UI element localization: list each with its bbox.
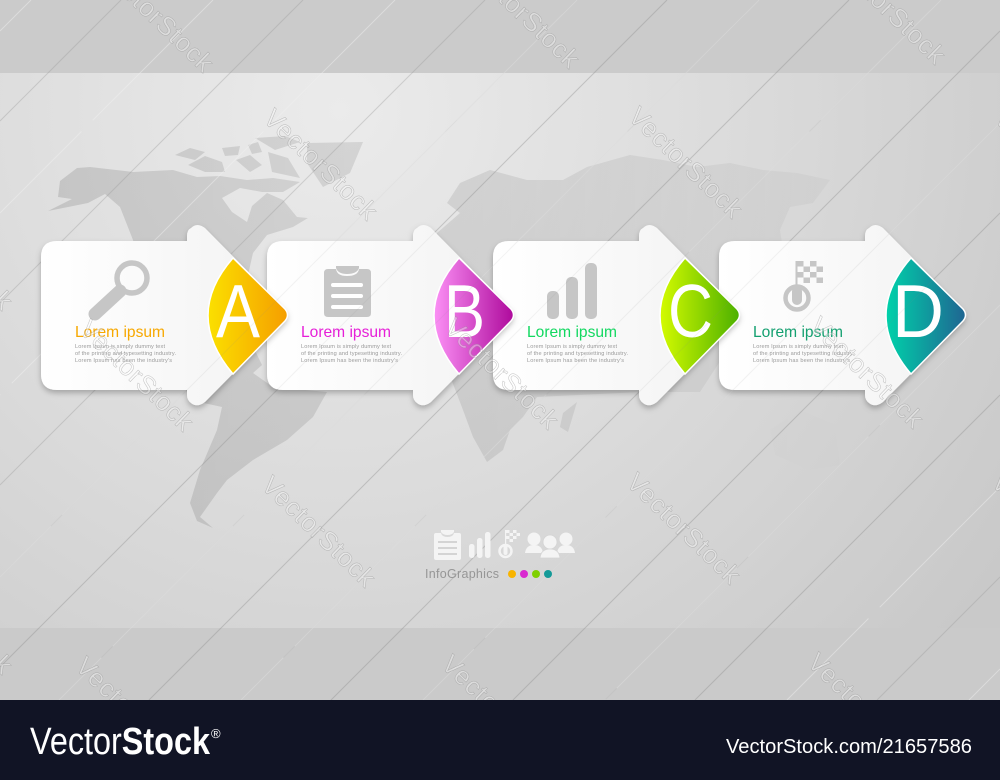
watermarks: VectorStock xyxy=(623,101,749,224)
watermarks: VectorStock xyxy=(802,647,928,770)
icon: small clipboard xyxy=(434,530,461,560)
letter badge A xyxy=(208,258,288,374)
text block D xyxy=(753,344,854,364)
text block C: of the printing and typesetting industry. xyxy=(527,351,628,357)
icon: clipboard xyxy=(324,266,371,317)
text block A: of the printing and typesetting industry. xyxy=(75,351,176,357)
icon: people xyxy=(525,532,575,558)
icon: magnifier xyxy=(95,263,147,314)
card shape xyxy=(493,225,740,405)
text block A: Lorem Ipsum has been the industry's xyxy=(75,358,172,364)
watermarks: VectorStock xyxy=(439,312,565,435)
footer bar xyxy=(0,700,1000,780)
letter badge C xyxy=(660,258,740,374)
icon: small bars xyxy=(469,532,490,558)
card shape xyxy=(41,225,288,405)
colour dots xyxy=(508,570,552,578)
text block B: Lorem Ipsum has been the industry's xyxy=(301,358,398,364)
card shape xyxy=(719,225,966,405)
text block D: Lorem Ipsum has been the industry's xyxy=(753,358,850,364)
world map xyxy=(48,136,840,528)
heading D: Lorem ipsum xyxy=(753,324,843,341)
watermarks: VectorStock xyxy=(70,651,196,774)
watermarks: VectorStock xyxy=(74,314,200,437)
heading C: Lorem ipsum xyxy=(527,324,617,341)
step card D xyxy=(719,225,966,405)
icon: small flag medal xyxy=(500,530,520,557)
watermarks: VectorStock xyxy=(804,311,930,434)
background: bottom band xyxy=(0,628,1000,700)
heading A: Lorem ipsum xyxy=(75,324,165,341)
heading B: Lorem ipsum xyxy=(301,324,391,341)
logo icons xyxy=(434,530,575,560)
footer logo: VectorStock xyxy=(30,721,211,763)
step card A xyxy=(41,225,288,405)
letter badge D: D xyxy=(892,269,944,353)
background: top band xyxy=(0,0,1000,73)
text block A xyxy=(75,344,176,364)
step card C xyxy=(493,225,740,405)
footer url: VectorStock.com/21657586 xyxy=(726,736,972,758)
watermarks: VectorStock xyxy=(621,467,747,590)
letter badge C: C xyxy=(668,269,713,353)
letter badge A: A xyxy=(216,269,260,353)
icon: flag and target xyxy=(786,261,823,310)
icon: bar chart xyxy=(547,263,597,319)
step card B xyxy=(267,225,514,405)
letter badge D xyxy=(886,258,966,374)
text block B xyxy=(301,344,402,364)
letter badge B xyxy=(434,258,514,374)
text block D: of the printing and typesetting industry. xyxy=(753,351,854,357)
watermarks: VectorStock xyxy=(436,649,562,772)
text block A: Lorem Ipsum is simply dummy text xyxy=(75,344,165,350)
watermarks: VectorStock xyxy=(256,470,382,593)
text block C xyxy=(527,344,628,364)
text block C: Lorem Ipsum has been the industry's xyxy=(527,358,624,364)
watermarks: VectorStock xyxy=(258,103,384,226)
text block B: of the printing and typesetting industry. xyxy=(301,351,402,357)
text block B: Lorem Ipsum is simply dummy text xyxy=(301,344,391,350)
background: main gradient panel xyxy=(0,73,1000,628)
text block D: Lorem Ipsum is simply dummy text xyxy=(753,344,843,350)
registered mark: ® xyxy=(211,726,221,741)
letter badge B: B xyxy=(444,269,485,353)
text block C: Lorem Ipsum is simply dummy text xyxy=(527,344,617,350)
logo label: InfoGraphics xyxy=(425,567,499,581)
card shape xyxy=(267,225,514,405)
